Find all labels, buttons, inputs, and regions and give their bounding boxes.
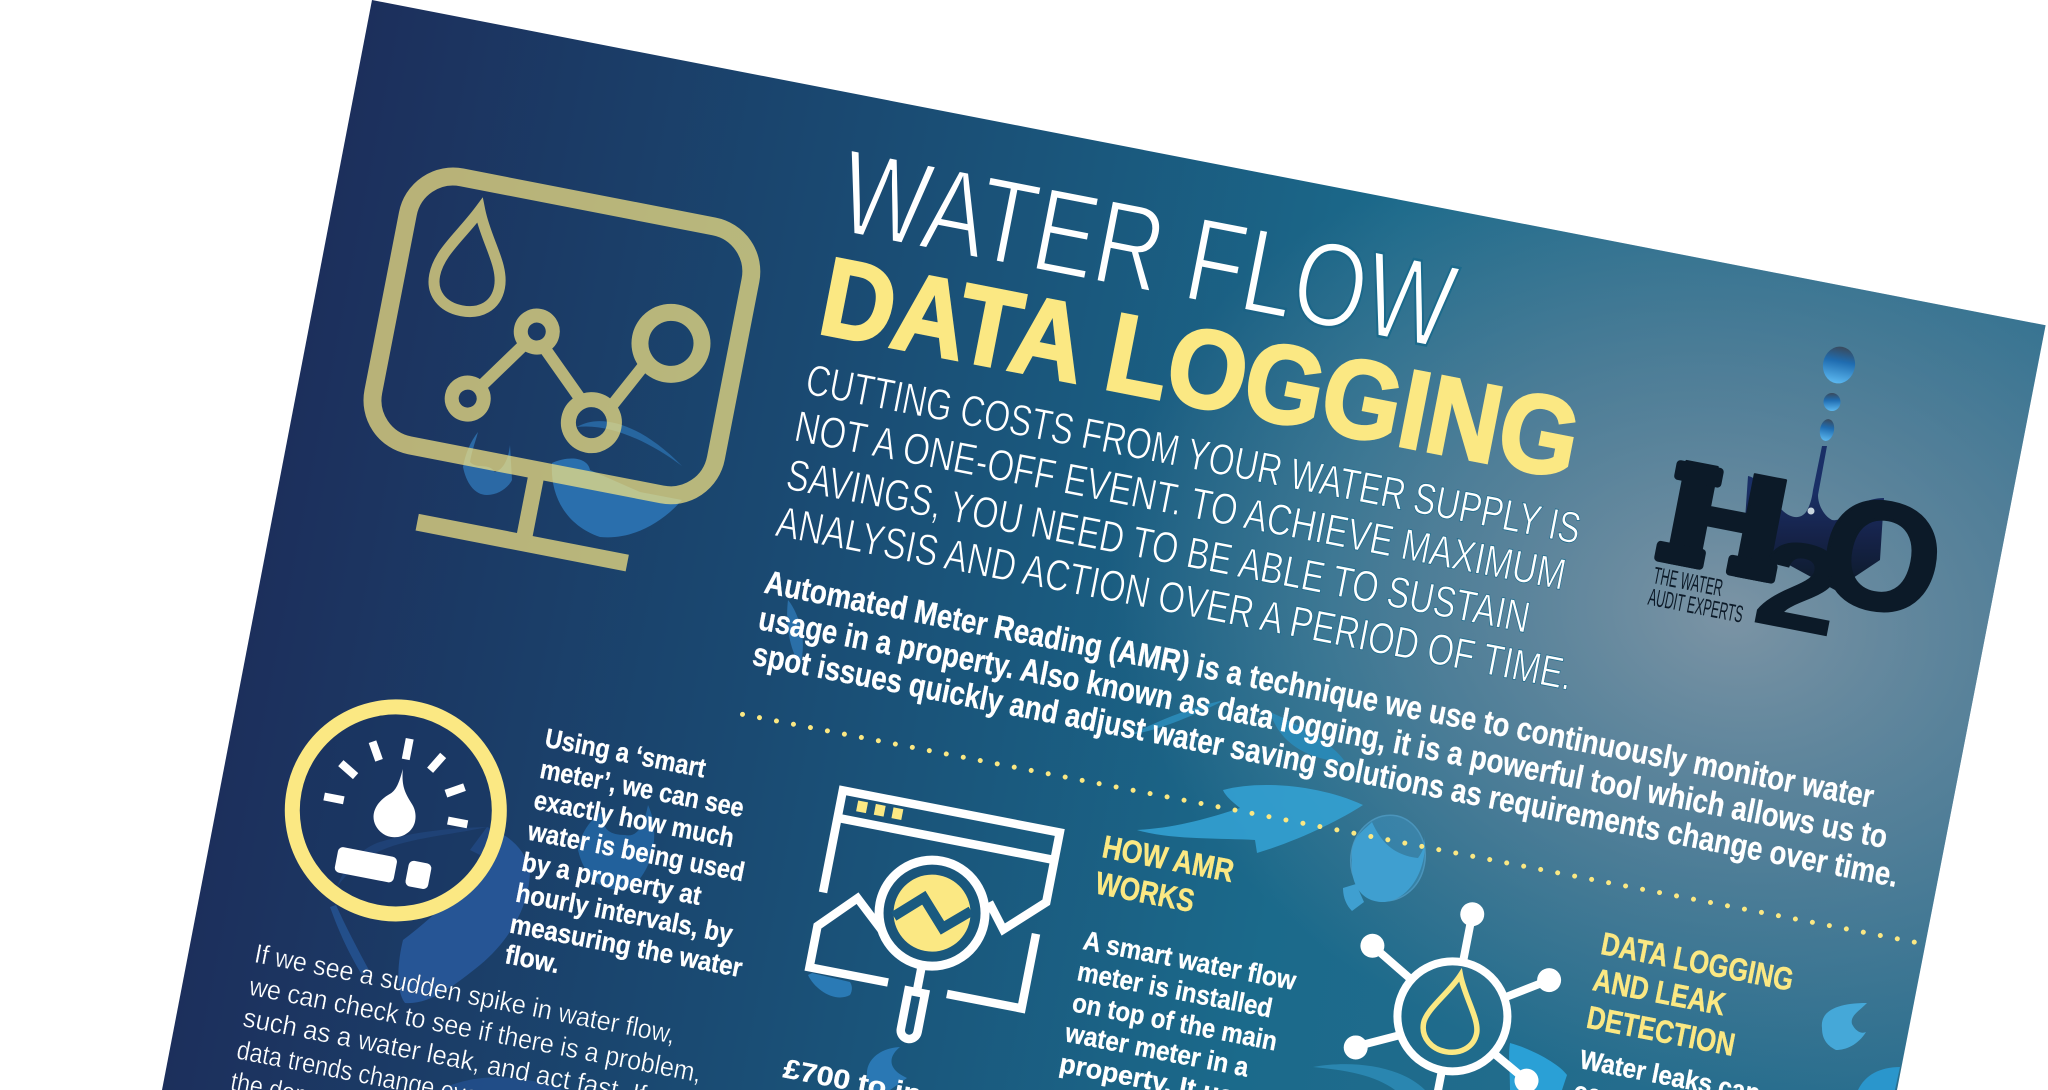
dotted divider bbox=[743, 714, 1924, 944]
logo: H2O the water audit experts: H bbox=[1644, 432, 1805, 632]
title line: data logging: DATA LOGGING bbox=[811, 234, 1590, 503]
icon: monitor with droplet and line chart bbox=[350, 169, 759, 576]
heading: data logging and leak detection: DATA LOGGING bbox=[1598, 925, 1797, 998]
text: a smart water flow meter: meter is installed bbox=[1075, 956, 1275, 1023]
text: a smart water flow meter: water meter in a bbox=[1062, 1017, 1252, 1083]
text: sudden spike in water flow: If we see a sudden spike in water flow, bbox=[252, 938, 678, 1050]
heading: data logging and leak detection bbox=[1583, 925, 1797, 1071]
subtitle bbox=[772, 355, 1604, 700]
text: using a smart meter: measuring the water bbox=[507, 909, 745, 983]
heading: how AMR works: HOW AMR bbox=[1100, 828, 1237, 889]
heading: how AMR works bbox=[1093, 828, 1237, 925]
text: a smart water flow meter bbox=[1056, 925, 1299, 1090]
text: using a smart meter: exactly how much bbox=[532, 785, 737, 853]
subtitle: SAVINGS, YOU NEED TO BE ABLE TO SUSTAIN bbox=[782, 450, 1534, 643]
subtitle: CUTTING COSTS FROM YOUR WATER SUPPLY IS bbox=[802, 355, 1585, 554]
logo: H2O the water audit experts: THE WATER bbox=[1651, 562, 1725, 602]
text: using a smart meter: hourly intervals, by bbox=[514, 878, 735, 949]
logo: H2O the water audit experts: 2 bbox=[1746, 513, 1852, 662]
text: a smart water flow meter: on top of the main bbox=[1070, 987, 1280, 1057]
text: using a smart meter: flow. bbox=[503, 939, 562, 979]
heading: data logging and leak detection: AND LEAK bbox=[1590, 961, 1729, 1022]
text: using a smart meter: Using a ‘smart bbox=[543, 723, 708, 783]
logo: droplets and splash connecting H and O bbox=[1745, 344, 1884, 590]
heading: how AMR works: WORKS bbox=[1093, 865, 1198, 919]
icon: browser window with house and magnifier bbox=[799, 790, 1060, 1060]
logo: H2O the water audit experts: O bbox=[1806, 460, 1957, 652]
icon: network hub with droplet bbox=[1329, 883, 1573, 1090]
subtitle: NOT A ONE-OFF EVENT. TO ACHIEVE MAXIMUM bbox=[791, 402, 1570, 600]
title bbox=[810, 124, 1611, 503]
text: using a smart meter bbox=[501, 723, 781, 1014]
logo: H2O the water audit experts bbox=[1640, 429, 1957, 680]
title line: water flow: WATER FLOW bbox=[830, 124, 1466, 375]
text: using a smart meter: water is being used bbox=[525, 816, 747, 887]
logo: H2O the water audit experts: AUDIT EXPERTS bbox=[1646, 584, 1745, 629]
subtitle: ANALYSIS AND ACTION OVER A PERIOD OF TIME. bbox=[772, 497, 1577, 700]
background water splash shapes bbox=[330, 421, 1900, 1090]
heading: data logging and leak detection: DETECTION bbox=[1584, 999, 1738, 1063]
icon: smart meter gauge bbox=[274, 689, 517, 932]
text: using a smart meter: by a property at bbox=[520, 847, 704, 911]
text: a smart water flow meter: A smart water flow bbox=[1081, 925, 1299, 996]
text: using a smart meter: meter’, we can see bbox=[538, 754, 746, 823]
